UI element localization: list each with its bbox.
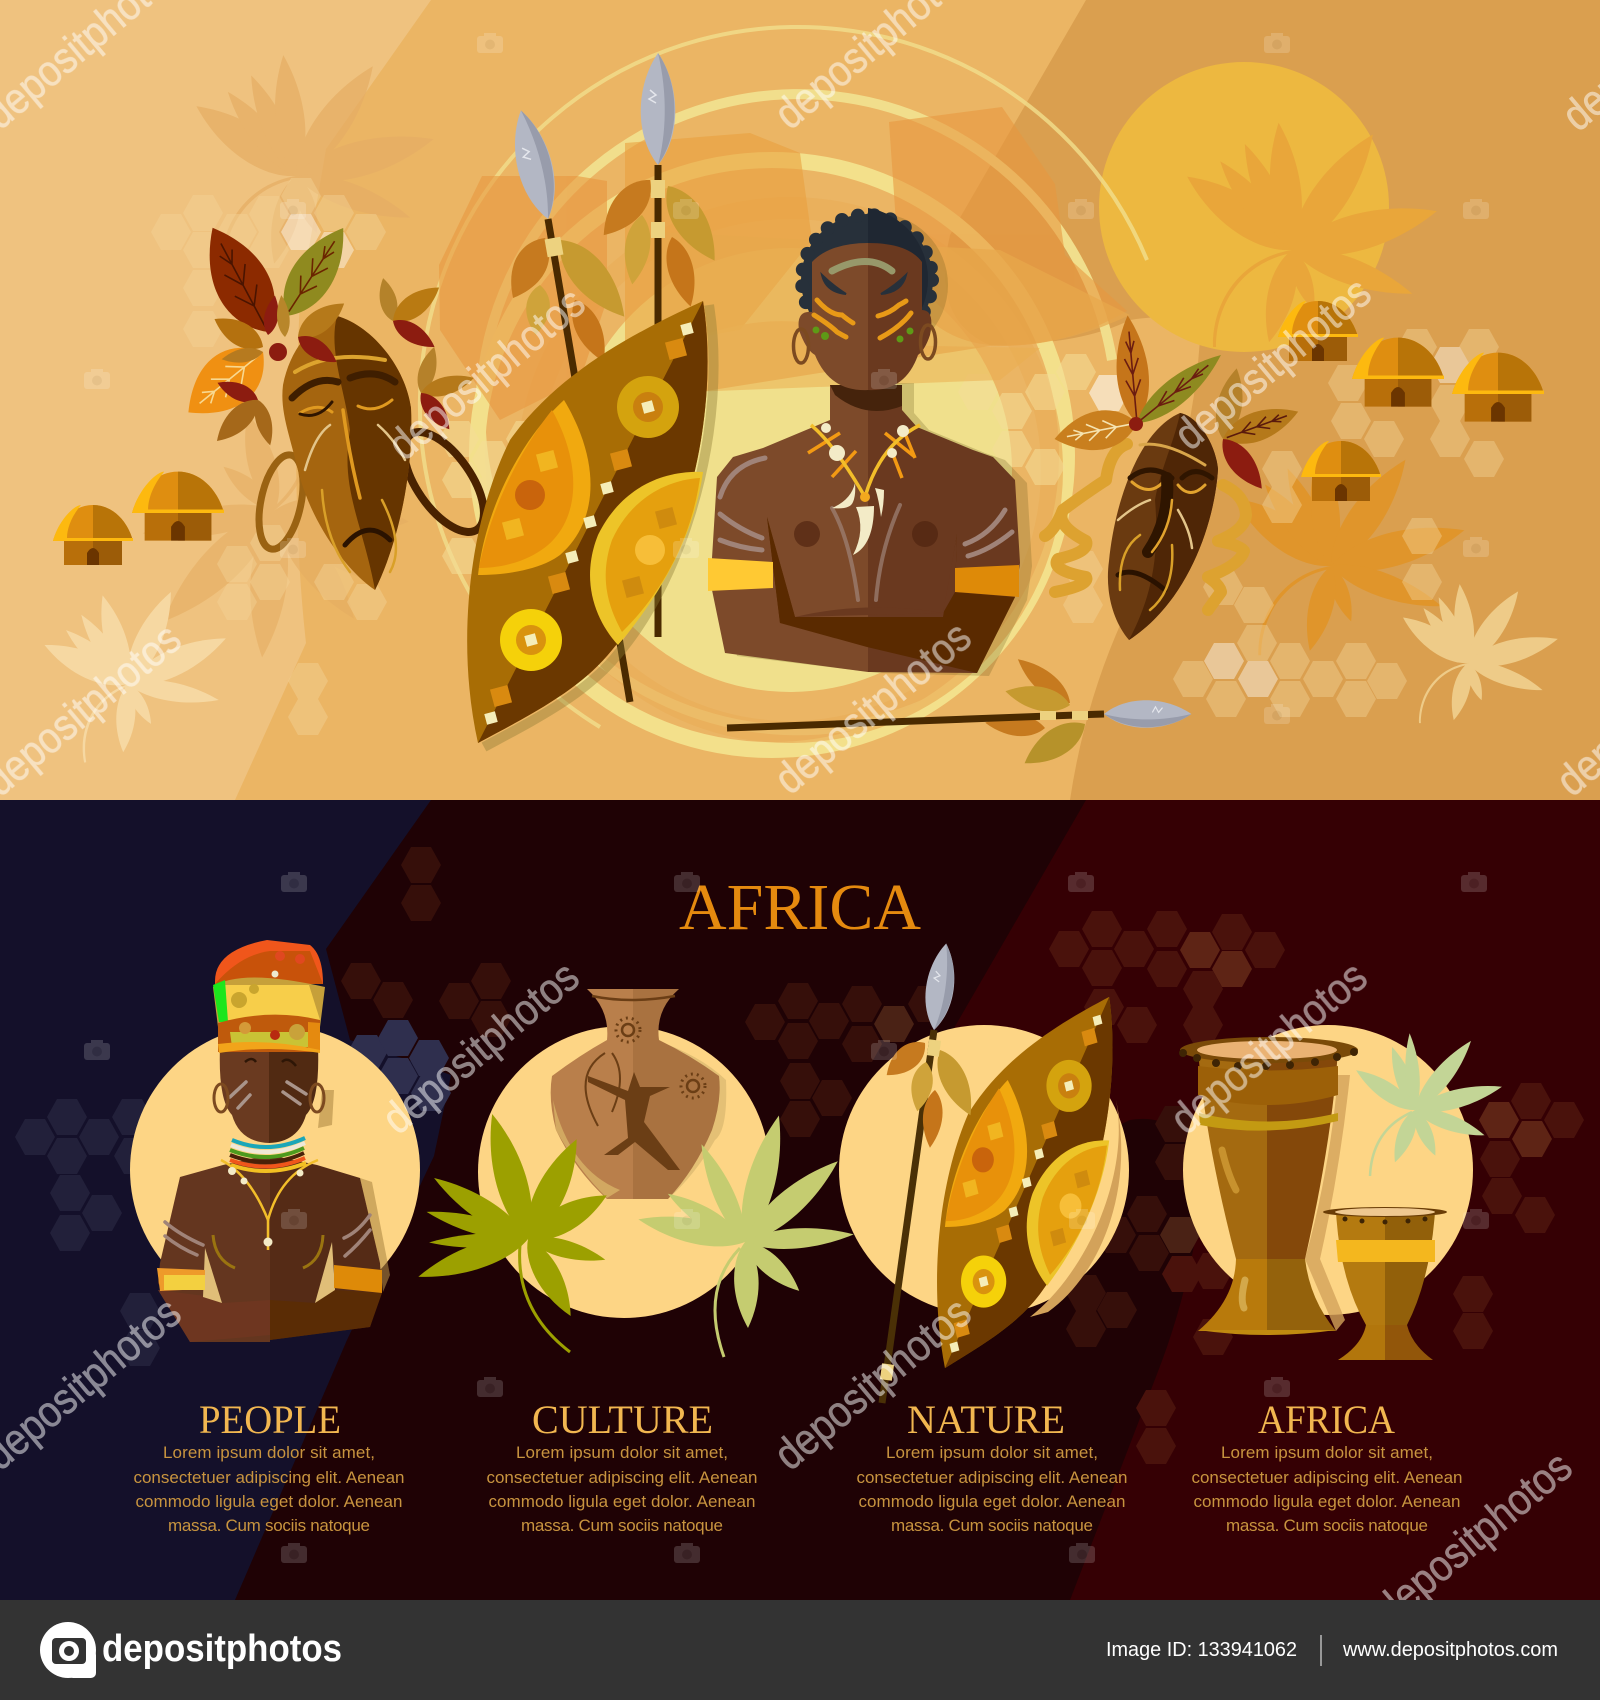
green leaf cluster [414, 1110, 613, 1352]
nature heading: NATURE [907, 1397, 1065, 1442]
people text: commodo ligula eget dolor. Aenean [136, 1492, 402, 1511]
culture text: massa. Cum sociis natoque [521, 1516, 723, 1535]
people circle [130, 1025, 420, 1315]
africa text: commodo ligula eget dolor. Aenean [1194, 1492, 1460, 1511]
depositphotos watermarks: depositphotos [1165, 268, 1380, 460]
spear 2 [592, 53, 728, 637]
nature text [856, 1443, 1128, 1535]
mask leaves [171, 215, 476, 449]
torso [712, 385, 1020, 673]
small drum [1323, 1207, 1447, 1360]
culture text: commodo ligula eget dolor. Aenean [488, 1492, 756, 1511]
panel: bottom section background [0, 800, 1600, 1600]
africa text: massa. Cum sociis natoque [1226, 1516, 1428, 1535]
warrior figure [708, 208, 1032, 676]
warrior shadow [724, 213, 1032, 676]
depositphotos watermarks: depositphotos [379, 278, 594, 470]
culture circle [478, 1026, 770, 1318]
culture text [486, 1443, 758, 1535]
woman armbands [157, 1268, 205, 1291]
culture heading: CULTURE [532, 1397, 713, 1442]
depositphotos watermarks: depositphotos [373, 952, 588, 1144]
people text [134, 1443, 404, 1535]
spear 1 [499, 106, 638, 702]
nature text: massa. Cum sociis natoque [891, 1516, 1093, 1535]
arm scars [720, 458, 1012, 600]
honeycomb pattern: top [151, 178, 1504, 735]
africa text: consectetuer adipiscing elit. Aenean [1192, 1468, 1462, 1487]
footer logo wordmark: depositphotos [102, 1628, 342, 1670]
mask face [282, 316, 411, 590]
woman figure [157, 940, 390, 1342]
woman body [158, 1155, 270, 1342]
archer silhouette [586, 1018, 705, 1170]
big drum [1179, 1037, 1358, 1335]
huts: right village [1278, 301, 1544, 501]
spear [879, 942, 982, 1403]
people text: massa. Cum sociis natoque [168, 1516, 370, 1535]
shield [937, 997, 1121, 1368]
tooth necklace [808, 423, 920, 555]
panel: culture [414, 989, 854, 1535]
depositphotos watermarks: depositphotos [1161, 952, 1376, 1144]
honeycomb pattern: bottom [15, 847, 1584, 1464]
camera watermark icons [84, 33, 1489, 1563]
hill shape [660, 232, 1130, 392]
nature text: consectetuer adipiscing elit. Aenean [856, 1468, 1128, 1487]
image id: Image ID: 133941062 [1106, 1639, 1297, 1661]
woman face [220, 1047, 269, 1143]
mask tendrils [1045, 444, 1246, 610]
people text: Lorem ipsum dolor sit amet, [163, 1443, 375, 1462]
footer logo icon [40, 1622, 96, 1678]
gold necklace [221, 1160, 318, 1250]
depositphotos watermarks: depositphotos [765, 612, 980, 804]
rock formations [439, 107, 1127, 420]
rings and glow behind warrior [420, 27, 1147, 750]
panel: top scene background [0, 0, 1600, 800]
panel: people [130, 940, 420, 1535]
clay vase [551, 989, 726, 1199]
depositphotos watermarks: depositphotos [765, 1288, 980, 1480]
nature text: commodo ligula eget dolor. Aenean [858, 1492, 1126, 1511]
africa heading: AFRICA [1258, 1397, 1395, 1442]
ground spear with leaves [727, 651, 1191, 775]
right tribal mask [1045, 314, 1303, 640]
woman shadow [317, 1090, 390, 1292]
face [799, 243, 931, 390]
sun [1099, 62, 1389, 352]
decorative flowers [30, 54, 1561, 767]
panel: africa drums [1179, 1025, 1504, 1535]
light leaf [1351, 1033, 1504, 1176]
people text: consectetuer adipiscing elit. Aenean [134, 1468, 404, 1487]
earrings [794, 325, 936, 363]
light leaf cluster [636, 1112, 854, 1357]
website url: www.depositphotos.com [1342, 1639, 1558, 1661]
headwrap [213, 940, 325, 1053]
nature text: Lorem ipsum dolor sit amet, [886, 1443, 1098, 1462]
war shield [467, 301, 714, 747]
mask leaves [1051, 314, 1303, 496]
honeycomb pattern: center [439, 354, 1129, 574]
armbands [708, 558, 773, 591]
panel: nature [839, 942, 1129, 1535]
footer bar [0, 1600, 1600, 1700]
nature circle [839, 1025, 1129, 1315]
africa circle [1183, 1025, 1473, 1315]
culture text: Lorem ipsum dolor sit amet, [516, 1443, 728, 1462]
huts: left village [53, 472, 224, 565]
people heading: PEOPLE [199, 1397, 341, 1442]
left tribal mask with leaves [171, 215, 499, 590]
title: AFRICA [679, 871, 921, 944]
africa text [1192, 1443, 1462, 1535]
mask ear rings [251, 419, 499, 553]
africa text: Lorem ipsum dolor sit amet, [1221, 1443, 1433, 1462]
collar [230, 1138, 306, 1171]
culture text: consectetuer adipiscing elit. Aenean [486, 1468, 758, 1487]
hair [801, 208, 933, 350]
mask face [1108, 413, 1218, 640]
